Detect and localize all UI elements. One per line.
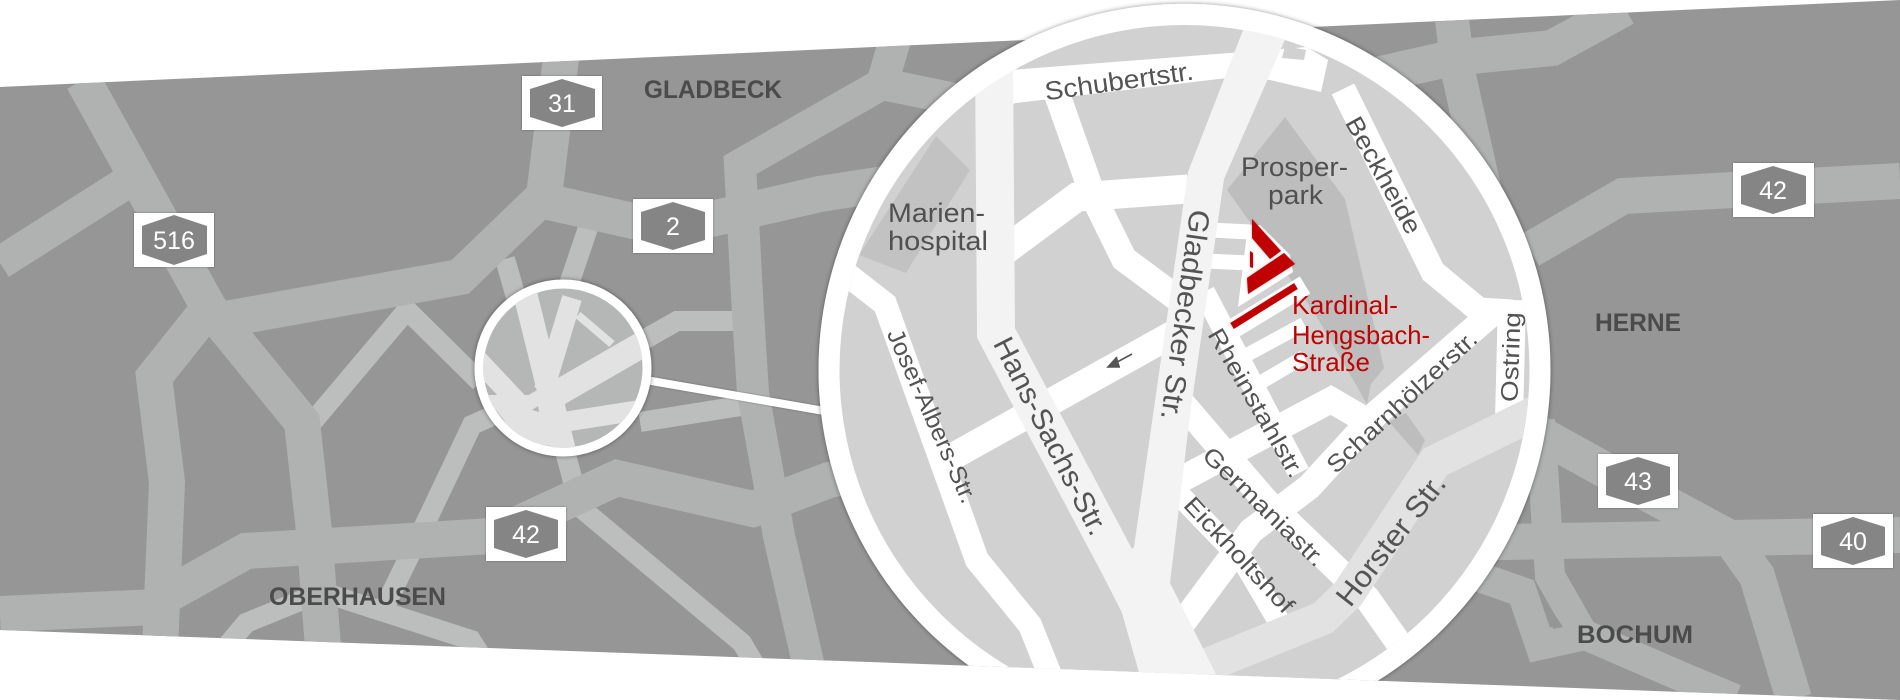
city label: Herne: HERNE [1595,309,1681,337]
magnified roads [483,292,642,448]
label: Kardinal-Hengsbach-Straße: Kardinal- [1292,290,1398,320]
label: Marienhospital: Marien- [888,198,985,228]
street map interior [835,24,1545,700]
label: Horster Straße: Horster Str. [1330,468,1453,613]
label: Marienhospital line 2: hospital [888,226,988,256]
label: Prosperpark: Prosper- [1241,152,1348,182]
badge: 31 [522,76,602,130]
gap between Bochum roads [1552,616,1563,629]
street: Horster Straße [1190,408,1545,672]
city label: Oberhausen: OBERHAUSEN [269,583,446,611]
label: Scharnhölzerstraße: Scharnhölzerstr. [1321,326,1483,479]
badge number 40: 40 [1839,528,1867,556]
badge number 42 west: 42 [512,521,540,549]
badge number 31: 31 [548,90,576,118]
street: Gladbecker Straße [1122,30,1285,675]
badge: 43 [1598,454,1678,508]
street highlight: Kardinal-Hengsbach-Straße [1232,286,1296,326]
label: Germaniastraße: Germaniastr. [1197,442,1331,573]
city label: Bochum: BOCHUM [1577,621,1693,649]
badge: 516 [134,213,214,267]
badge: 42 east [1733,163,1814,217]
badge number 2: 2 [666,213,680,241]
badge: 40 [1813,514,1893,568]
badge number 43: 43 [1624,468,1652,496]
label: Beckheide: Beckheide [1339,112,1427,239]
label: Gladbecker Straße: Gladbecker Str. [1154,208,1215,422]
badge: 42 west [486,507,566,561]
connector line between magnifiers [640,379,830,412]
street: Hans-Sachs-Straße [975,71,1132,612]
block: Marienhospital [859,136,970,273]
city label: Gladbeck: GLADBECK [644,76,782,104]
white circle [818,4,1550,700]
label: Rheinstahlstraße: Rheinstahlstr. [1202,324,1309,483]
label: Prosperpark line 2: park [1268,180,1324,210]
label: Kardinal-Hengsbach-Straße line 2: Hengsbach- [1292,320,1430,350]
badge: 2 [633,199,713,253]
block: dark patch [1389,413,1425,455]
label: Eickholtshof: Eickholtshof [1178,492,1300,619]
block: Prosperpark [1227,117,1384,404]
label: Schubertstraße: Schubertstr. [1043,56,1195,106]
label: Josef-Albers-Straße: Josef-Albers-Str. [881,325,982,508]
white streets [835,46,1512,680]
badge number 516: 516 [153,227,195,255]
label: Ostring: Ostring [1496,312,1527,402]
label: Kardinal-Hengsbach-Straße line 3: Straße [1292,347,1370,377]
label: Hans-Sachs-Straße: Hans-Sachs-Str. [986,332,1114,541]
destination marker [1247,219,1295,294]
small magnifier [478,284,650,455]
arrow: one-way direction [1108,354,1132,367]
large magnifier: street map [818,4,1550,700]
badge number 42 east: 42 [1759,177,1787,205]
minor roads [225,228,755,670]
